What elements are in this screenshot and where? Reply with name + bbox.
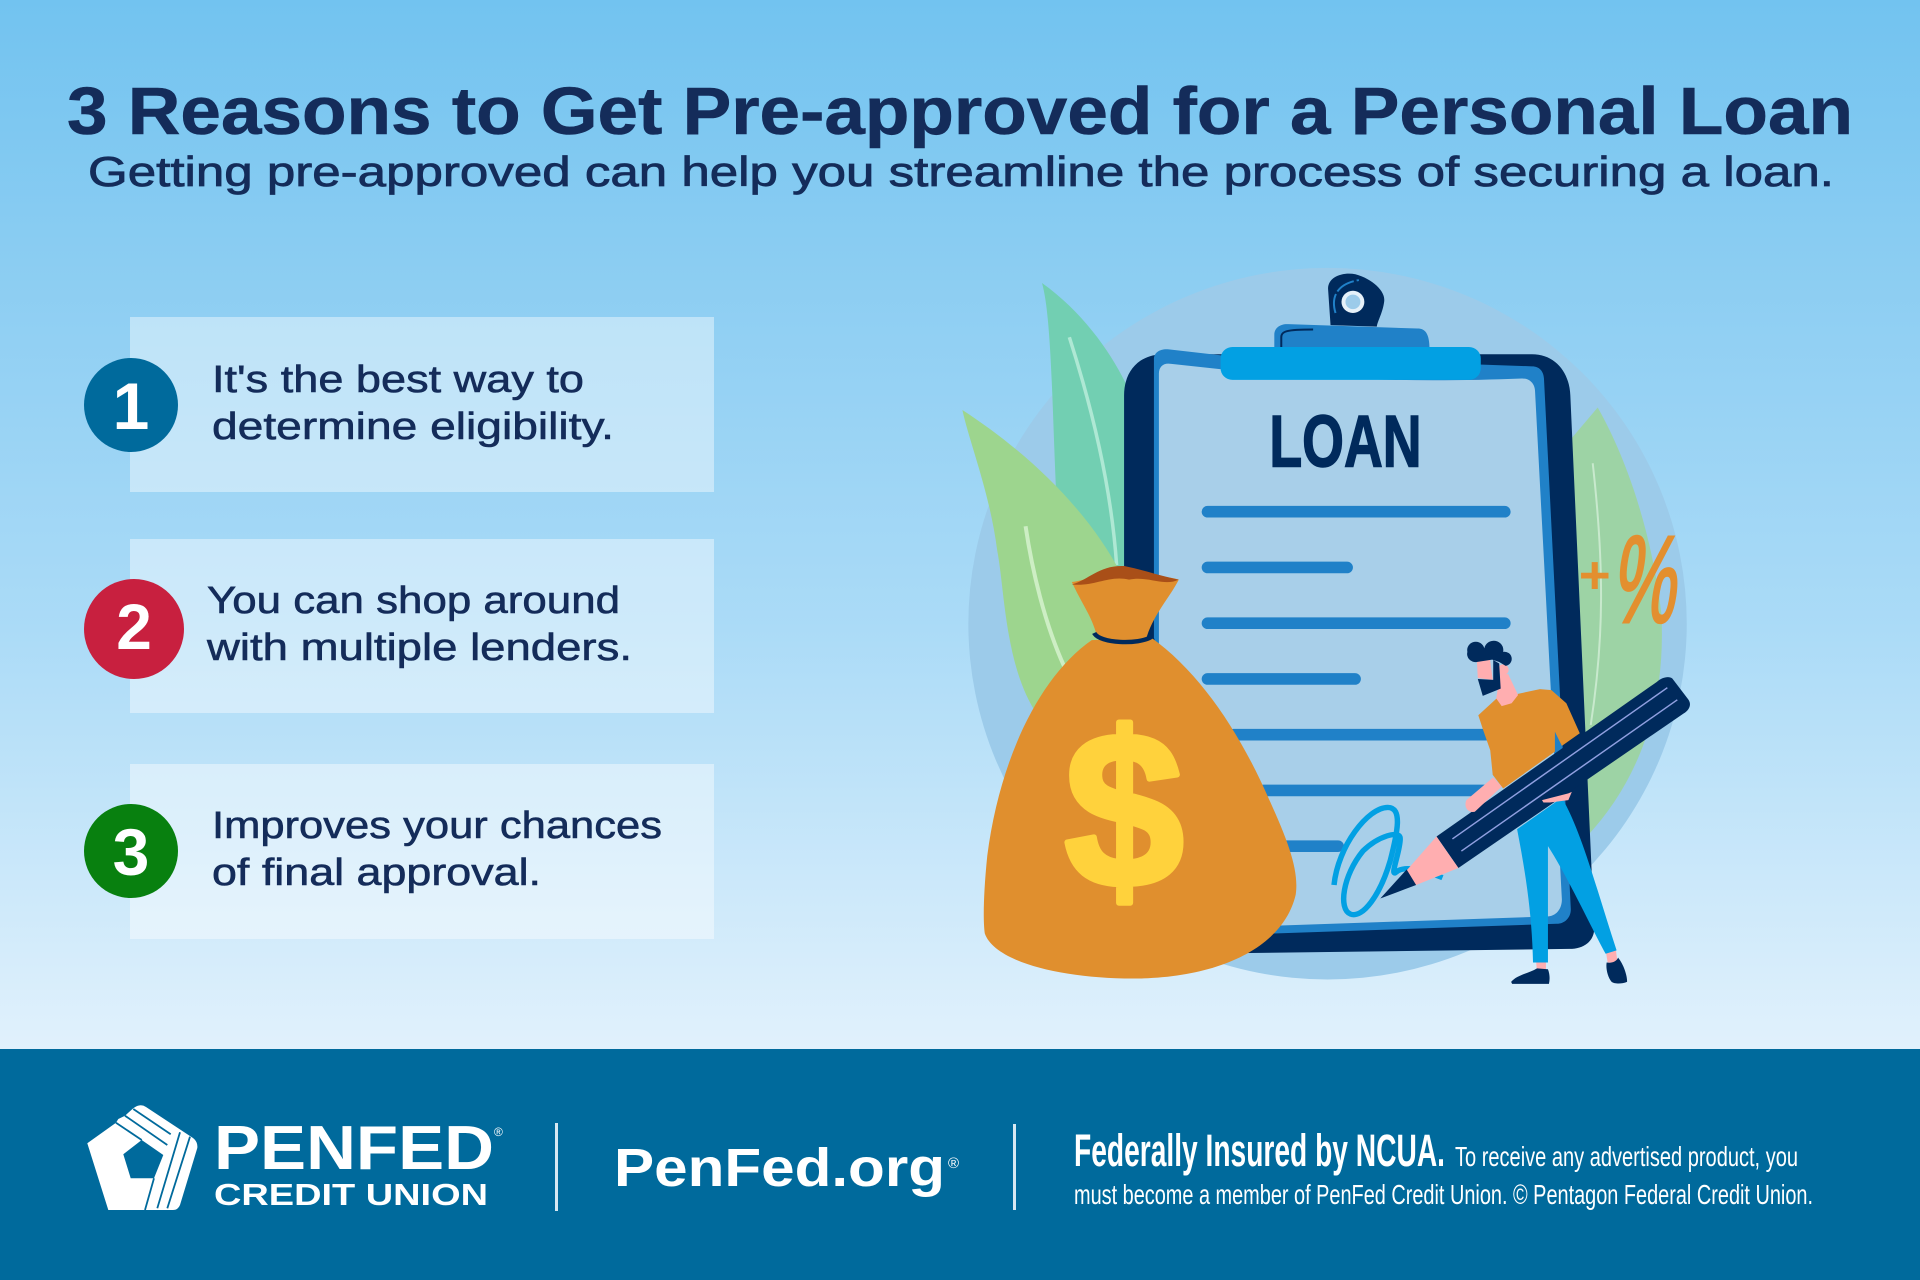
clipboard paper xyxy=(1159,364,1562,926)
disclaimer xyxy=(1074,1125,1813,1210)
man figure xyxy=(1380,641,1690,984)
reason 3 text: Improves your chances xyxy=(212,805,662,847)
reason 2 text: You can shop around xyxy=(207,580,620,622)
card 1 panel xyxy=(130,317,714,492)
logo wordmark xyxy=(214,1114,503,1212)
badge 3 xyxy=(84,804,178,898)
logo wordmark: ® xyxy=(494,1125,503,1139)
face xyxy=(1477,657,1493,680)
neck and ear xyxy=(1496,674,1518,706)
percent symbols: + xyxy=(1579,546,1611,605)
clip clamp xyxy=(1221,347,1481,380)
number 1: 1 xyxy=(113,369,149,443)
website: PenFed.org xyxy=(614,1138,945,1198)
clipboard board xyxy=(1124,354,1594,954)
LOAN label: LOAN xyxy=(1269,400,1422,482)
logo: PenFed pentagon mark xyxy=(87,1105,197,1210)
website: ® xyxy=(948,1155,959,1172)
clipboard paper edge xyxy=(1154,349,1571,934)
reason 1 xyxy=(84,317,714,492)
footer band xyxy=(0,1049,1920,1280)
reason 3 text: of final approval. xyxy=(212,852,541,894)
footer divider 1 xyxy=(555,1123,558,1211)
beard xyxy=(1478,660,1501,696)
shirt xyxy=(1478,689,1580,789)
percent symbols xyxy=(1579,510,1690,649)
reason 3 text xyxy=(212,805,662,894)
subtitle: Getting pre-approved can help you streamline the process of securing a loan. xyxy=(88,148,1834,195)
logo wordmark: CREDIT UNION xyxy=(214,1177,488,1212)
ankles xyxy=(1536,948,1618,972)
backdrop circle xyxy=(968,268,1687,979)
footer divider 2 xyxy=(1013,1124,1016,1210)
money bag xyxy=(984,566,1296,979)
percent symbols: % xyxy=(1607,510,1690,649)
paper text lines xyxy=(1208,512,1505,846)
leaf: teal xyxy=(1042,283,1129,580)
dollar sign: $ xyxy=(1064,687,1184,934)
reason 1 text: determine eligibility. xyxy=(212,406,614,448)
reason 3 xyxy=(84,764,714,939)
badge 2 xyxy=(84,579,184,679)
badge 1 xyxy=(84,358,178,452)
reason 1 text: It's the best way to xyxy=(212,359,584,401)
clip base xyxy=(1274,324,1430,349)
clip tab xyxy=(1328,274,1384,327)
card 3 panel xyxy=(130,764,714,939)
hands xyxy=(1465,777,1572,812)
hair xyxy=(1467,641,1512,666)
legs xyxy=(1517,798,1617,963)
illustration: loan clipboard, money bag and man with pencil xyxy=(962,268,1690,984)
reason 2 xyxy=(84,539,714,713)
signature xyxy=(1334,807,1442,915)
logo wordmark: PENFED xyxy=(214,1114,494,1183)
leaf: green left xyxy=(962,410,1149,710)
title: 3 Reasons to Get Pre-approved for a Personal Loan xyxy=(67,74,1853,149)
reason 2 text: with multiple lenders. xyxy=(206,627,632,669)
feet xyxy=(1511,958,1627,984)
number 3: 3 xyxy=(113,815,149,889)
reason 2 text xyxy=(206,580,632,669)
number 2: 2 xyxy=(116,591,152,663)
pencil xyxy=(1380,677,1690,899)
disclaimer: Federally Insured by NCUA. xyxy=(1074,1125,1445,1176)
reason 1 text xyxy=(212,359,614,448)
leaf: green right xyxy=(1567,408,1662,836)
card 2 panel xyxy=(130,539,714,713)
